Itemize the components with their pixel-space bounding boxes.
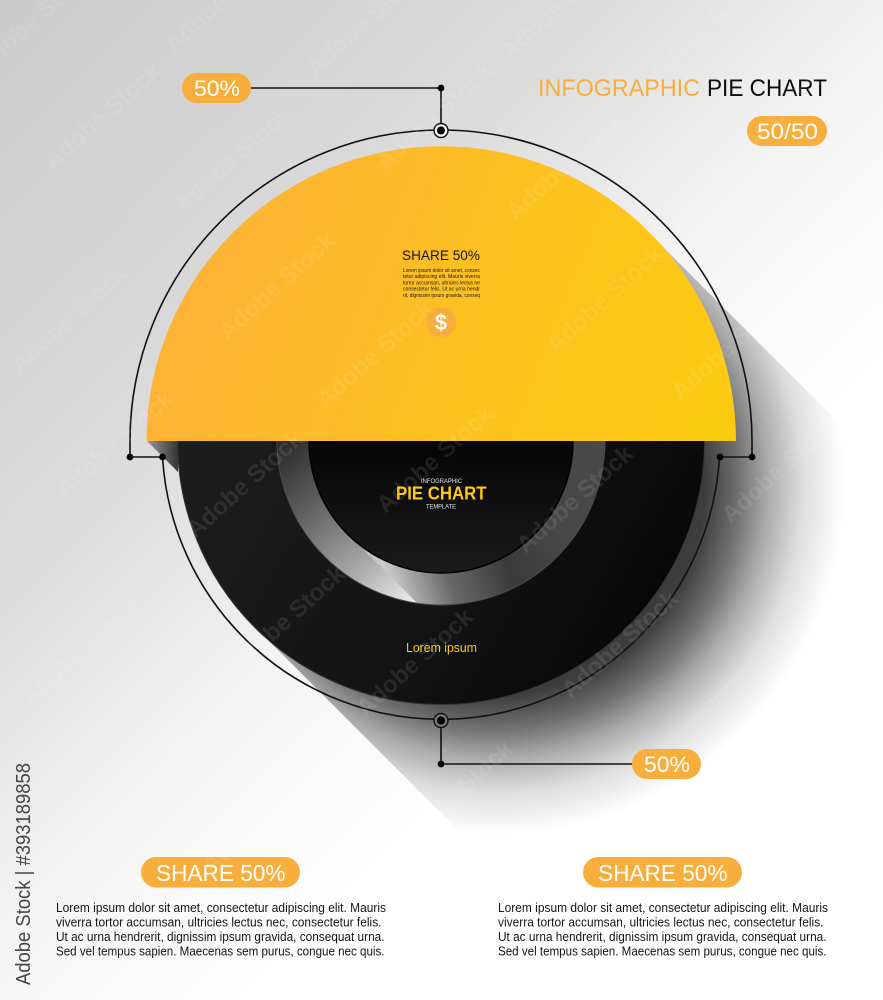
- center title: INFOGRAPHIC: [421, 478, 462, 485]
- watermark: Adobe Stock pattern: Adobe Stock: [223, 560, 351, 679]
- watermark: Adobe Stock pattern: Adobe Stock: [351, 603, 479, 722]
- left share block: [56, 857, 386, 958]
- callout: top 50%: [182, 73, 448, 138]
- segment body text: rit, dignissim ipsum gravida, conseq: [403, 293, 480, 299]
- center title: TEMPLATE: [426, 504, 457, 510]
- right share text: [498, 901, 828, 958]
- segment body text: tortor accumsan, ultricies lectus ne: [403, 280, 480, 286]
- left share text: Sed vel tempus sapien. Maecenas sem purus, congue nec quis.: [56, 944, 384, 958]
- title: [538, 75, 827, 102]
- watermark: Adobe Stock pattern: Adobe Stock: [196, 760, 324, 879]
- center title: [396, 478, 486, 510]
- left share text: Ut ac urna hendrerit, dignissim ipsum gravida, consequat urna.: [56, 930, 384, 944]
- icon: dollar: [426, 307, 456, 337]
- left share text: [56, 901, 386, 958]
- black donut chart segment: [178, 441, 705, 705]
- badge: 50/50: 50/50: [757, 119, 818, 144]
- watermark: Adobe Stock pattern: Adobe Stock: [371, 400, 499, 519]
- long drop shadow: [255, 233, 883, 1000]
- watermark: Adobe Stock pattern: Adobe Stock: [681, 613, 809, 732]
- donut groove: [278, 441, 604, 604]
- callout: top 50%: 50%: [194, 76, 240, 101]
- watermark: Adobe Stock pattern: Adobe Stock: [169, 100, 297, 219]
- icon: dollar: $: [435, 310, 447, 335]
- title: INFOGRAPHIC: [538, 75, 700, 102]
- center title: PIE CHART: [396, 484, 486, 504]
- right share pill: SHARE 50%: [598, 860, 728, 886]
- segment body text: tetur adipiscing elit. Mauris viverra: [403, 274, 481, 280]
- watermark: Adobe Stock pattern: Adobe Stock: [391, 735, 519, 854]
- outer connector ring: [127, 130, 755, 719]
- right share text: viverra tortor accumsan, ultricies lectus nec, consectetur felis.: [498, 916, 824, 930]
- left share text: Lorem ipsum dolor sit amet, consectetur adipiscing elit. Mauris: [56, 901, 386, 915]
- segment body text: consectetur felis. Ut ac urna hendr: [403, 287, 480, 293]
- watermark: Adobe Stock pattern: Adobe Stock: [541, 240, 669, 359]
- left share pill: SHARE 50%: [156, 860, 286, 886]
- shadow wedge under yellow segment: [147, 441, 178, 472]
- watermark: Adobe Stock pattern: Adobe Stock: [39, 57, 167, 176]
- right share text: Lorem ipsum dolor sit amet, consectetur adipiscing elit. Mauris: [498, 901, 828, 915]
- watermark: Adobe Stock pattern: Adobe Stock: [501, 107, 629, 226]
- watermark: Adobe Stock pattern: Adobe Stock: [213, 227, 341, 346]
- left share text: viverra tortor accumsan, ultricies lectus nec, consectetur felis.: [56, 916, 382, 930]
- watermark: Adobe Stock pattern: Adobe Stock: [521, 770, 649, 889]
- callout: bottom 50%: 50%: [644, 752, 690, 777]
- stock id side text: Adobe Stock | #393189858: [13, 763, 35, 985]
- right share block: [498, 857, 828, 958]
- right share text: Sed vel tempus sapien. Maecenas sem purus, congue nec quis.: [498, 944, 826, 958]
- right share text: Ut ac urna hendrerit, dignissim ipsum gravida, consequat urna.: [498, 930, 826, 944]
- watermark: Adobe Stock pattern: Adobe Stock: [666, 287, 794, 406]
- segment body text: [403, 268, 481, 299]
- watermark: Adobe Stock pattern: Adobe Stock: [16, 593, 144, 712]
- watermark: Adobe Stock pattern: Adobe Stock: [181, 425, 309, 544]
- segment body text: Lorem ipsum dolor sit amet, consec: [403, 268, 480, 274]
- watermark: Adobe Stock pattern: Adobe Stock: [311, 295, 439, 414]
- watermark: Adobe Stock pattern: Adobe Stock: [5, 260, 133, 379]
- watermark: Adobe Stock pattern: Adobe Stock: [511, 440, 639, 559]
- yellow half pie segment: [146, 146, 736, 441]
- watermark: Adobe Stock pattern: Adobe Stock: [556, 585, 684, 704]
- watermark: Adobe Stock pattern: Adobe Stock: [701, 67, 829, 186]
- donut label: Lorem ipsum: [406, 640, 477, 655]
- watermark: Adobe Stock pattern: Adobe Stock: [371, 57, 499, 176]
- callout: bottom 50%: [434, 714, 701, 779]
- inner disc: [309, 309, 573, 573]
- title: PIE CHART: [707, 75, 827, 102]
- watermark: Adobe Stock pattern: Adobe Stock: [716, 410, 844, 529]
- watermark: Adobe Stock pattern: Adobe Stock: [61, 720, 189, 839]
- badge: 50/50: [747, 116, 827, 146]
- watermark: Adobe Stock pattern: Adobe Stock: [51, 385, 179, 504]
- segment heading: SHARE 50%: [402, 247, 480, 263]
- watermark: Adobe Stock pattern: Adobe Stock: [726, 740, 854, 859]
